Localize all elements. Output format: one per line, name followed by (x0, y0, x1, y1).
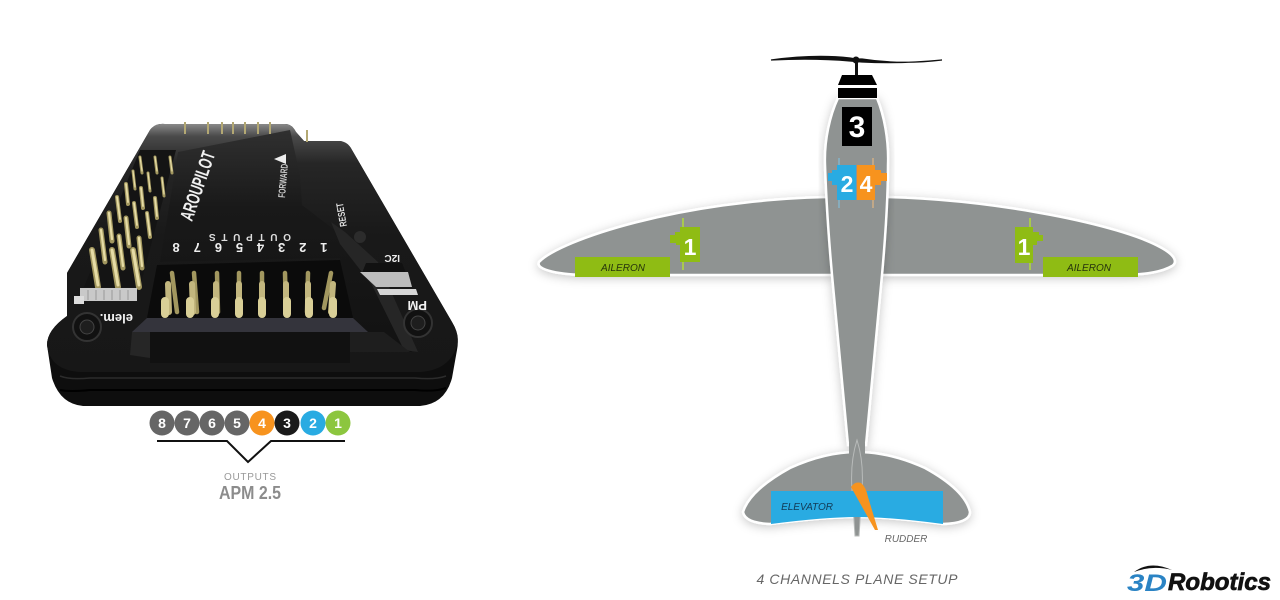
back pin row (172, 273, 331, 312)
cowl band (838, 88, 877, 98)
outputs caption: OUTPUTS (224, 472, 276, 483)
top header pins (185, 122, 307, 142)
outputs bracket (157, 441, 345, 462)
badge 5: 5 (233, 415, 241, 431)
badge 2: 2 (309, 415, 317, 431)
rudder (851, 482, 878, 530)
connector front block (150, 332, 350, 363)
tail fin (852, 440, 862, 536)
logo 3D: 3D (1127, 570, 1167, 597)
icon: forward arrow (274, 154, 286, 164)
board label: pm: PM (408, 298, 427, 313)
badge 1: 1 (334, 415, 342, 431)
propeller blades (771, 56, 942, 63)
badge 3: 3 (283, 415, 291, 431)
telemetry connector (74, 288, 137, 304)
board label: reset: RESET (335, 202, 350, 227)
badge 3 (274, 410, 300, 436)
left screw (73, 313, 101, 341)
i2c connector (360, 263, 412, 287)
logo Robotics: Robotics (1168, 569, 1271, 596)
servo 3 (842, 107, 872, 146)
right servo 1: 1 (1018, 234, 1031, 260)
cowl top (838, 75, 877, 85)
board edge layers (60, 376, 446, 391)
propeller (771, 56, 942, 75)
board body (47, 124, 458, 406)
servo 2: 2 (841, 171, 853, 197)
apm caption: APM 2.5 (219, 483, 281, 503)
left servo 1 (670, 218, 700, 270)
flight controller board (47, 122, 458, 406)
output connector well (147, 260, 353, 318)
reset button (354, 231, 366, 243)
badge 5 (224, 410, 250, 436)
board label: forward: FORWARD (277, 163, 291, 198)
plane diagram (539, 56, 1175, 545)
right aileron (1043, 257, 1138, 277)
badge 2 (300, 410, 326, 436)
left aileron: AILERON (600, 263, 646, 274)
badge 4 (250, 410, 274, 436)
pm connector (377, 289, 418, 295)
propeller hub and shaft (852, 56, 860, 75)
right screw (404, 309, 432, 337)
badge 7 (174, 410, 200, 436)
elevator: ELEVATOR (781, 502, 833, 513)
rudder label: RUDDER (885, 534, 927, 545)
board top plate (47, 124, 458, 372)
board label: i2c: I2C (384, 252, 400, 263)
fuselage (825, 98, 888, 445)
left pin bed (84, 150, 176, 287)
logo swoosh (1134, 565, 1172, 572)
badge 7: 7 (183, 415, 191, 431)
left wing (539, 197, 833, 275)
pin shafts (92, 157, 172, 287)
3D Robotics logo (1127, 565, 1271, 597)
front block side left (130, 332, 150, 358)
board label: ardupilot logo: AROUPILOT (177, 148, 220, 224)
connector frame (132, 318, 368, 332)
left servo 1: 1 (684, 234, 697, 260)
diagonal ridge (331, 222, 418, 352)
servo 4 (857, 158, 887, 208)
front pin row (165, 301, 333, 314)
servo 2 (828, 158, 856, 208)
right aileron: AILERON (1066, 263, 1112, 274)
badge 8: 8 (158, 415, 166, 431)
fuselage to tail join (849, 443, 865, 455)
plane caption: 4 CHANNELS PLANE SETUP (756, 571, 958, 587)
output pins (165, 273, 333, 314)
servo 4: 4 (860, 171, 873, 197)
left header pins (92, 157, 172, 287)
board label: telem: elem. (100, 311, 133, 326)
badge 6: 6 (208, 415, 216, 431)
servo 3: 3 (849, 111, 865, 144)
left aileron (575, 257, 670, 277)
right servo 1 (1015, 218, 1043, 270)
raised centre section (160, 130, 412, 352)
front block side right (350, 332, 410, 352)
badge 6 (200, 410, 224, 436)
badge 8 (150, 410, 174, 436)
badge 1 (326, 410, 350, 436)
board label: output numbers: 1 2 3 4 5 6 7 8 (172, 240, 328, 255)
pin highlights (92, 157, 172, 285)
elevator (771, 491, 943, 524)
middle pin row (168, 284, 333, 312)
output channel badges (150, 410, 350, 436)
tailplane (743, 452, 970, 524)
right wing (881, 197, 1175, 275)
board label: outputs: OUTPUTS (209, 231, 291, 242)
badge 4: 4 (258, 415, 266, 431)
